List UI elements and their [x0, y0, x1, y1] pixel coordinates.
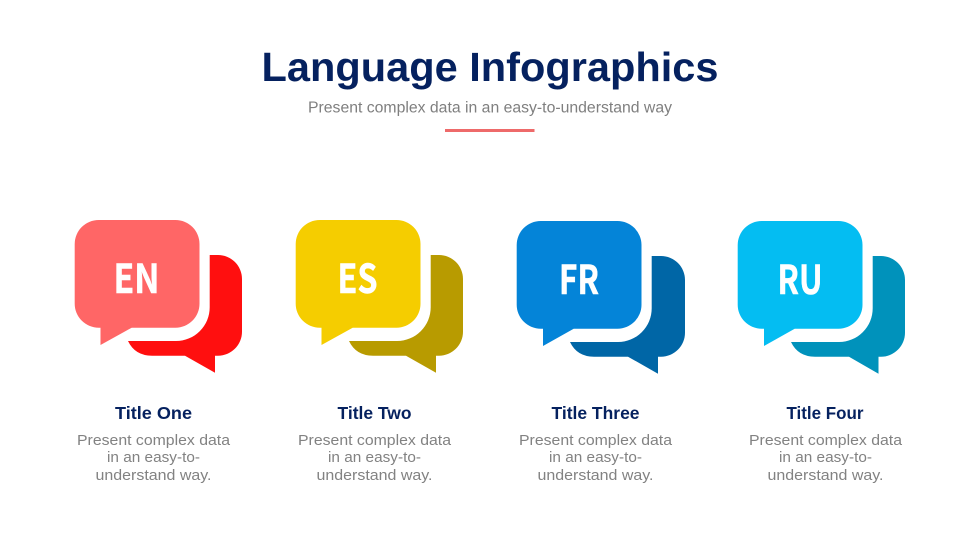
text block RU: in an easy-to-	[779, 450, 872, 466]
icon: front speech bubble FR	[517, 221, 642, 346]
text block EN: in an easy-to-	[107, 450, 200, 466]
language code EN: EN	[114, 247, 160, 305]
text block EN: understand way.	[96, 468, 212, 484]
panel: English	[75, 220, 242, 484]
panel: French	[517, 221, 685, 484]
text block RU: understand way.	[768, 468, 884, 484]
panel: Spanish	[296, 220, 463, 484]
text block ES	[298, 433, 452, 484]
accent rule	[445, 129, 534, 132]
text block EN	[77, 433, 231, 484]
text block RU: Present complex data	[749, 433, 903, 449]
text block FR: in an easy-to-	[549, 450, 642, 466]
text block EN: Present complex data	[77, 433, 231, 449]
language code ES: ES	[338, 247, 378, 305]
subtitle: Present complex data in an easy-to-understand way	[308, 100, 672, 116]
title: Language Infographics	[262, 44, 718, 90]
icon: front speech bubble ES	[296, 220, 420, 345]
icon: back speech bubble FR	[570, 256, 685, 374]
icon: back speech bubble RU	[791, 256, 905, 374]
language code FR: FR	[559, 248, 599, 306]
heading: Title One: Title One	[115, 403, 192, 423]
heading: Title Two: Title Two	[338, 403, 412, 423]
text block ES: understand way.	[316, 468, 432, 484]
heading: Title Three: Title Three	[552, 403, 640, 423]
heading: Title Four: Title Four	[786, 403, 864, 423]
language code RU: RU	[778, 248, 822, 306]
text block FR	[519, 433, 673, 484]
icon: front speech bubble RU	[738, 221, 862, 346]
icon: front speech bubble EN	[75, 220, 200, 345]
icon: back speech bubble ES	[349, 255, 463, 373]
text block ES: Present complex data	[298, 433, 452, 449]
text block FR: understand way.	[538, 468, 654, 484]
text block ES: in an easy-to-	[328, 450, 421, 466]
text block RU	[749, 433, 903, 484]
text block FR: Present complex data	[519, 433, 673, 449]
panel: Russian	[738, 221, 905, 484]
icon: back speech bubble EN	[128, 255, 242, 373]
